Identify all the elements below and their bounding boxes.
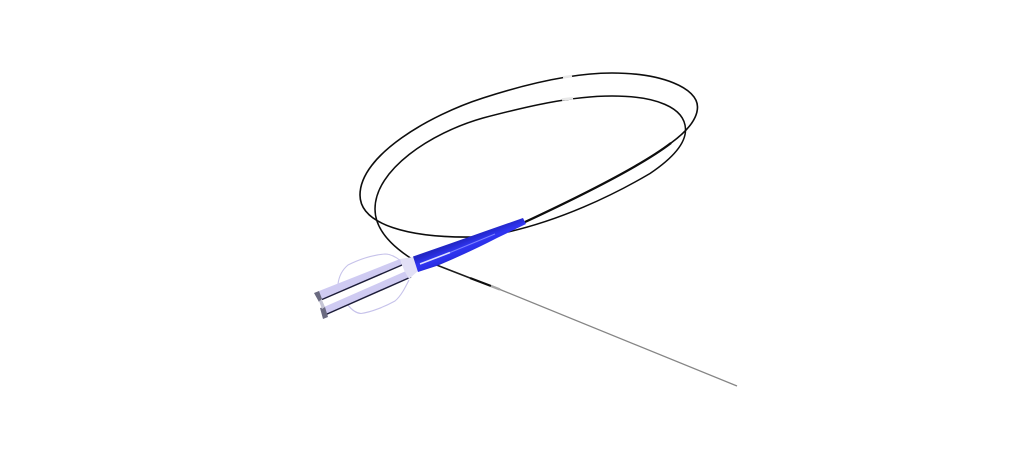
distal tip end caps — [314, 291, 328, 319]
marker band on inner loop — [562, 98, 573, 100]
blue tapered shaft — [413, 218, 526, 272]
outer loop of catheter shaft — [360, 73, 698, 237]
balloon inner tubes — [319, 257, 418, 315]
marker band on outer loop — [563, 76, 572, 77]
guide wire — [434, 264, 737, 386]
inner loop of catheter shaft — [375, 96, 686, 259]
balloon membrane — [338, 254, 409, 314]
